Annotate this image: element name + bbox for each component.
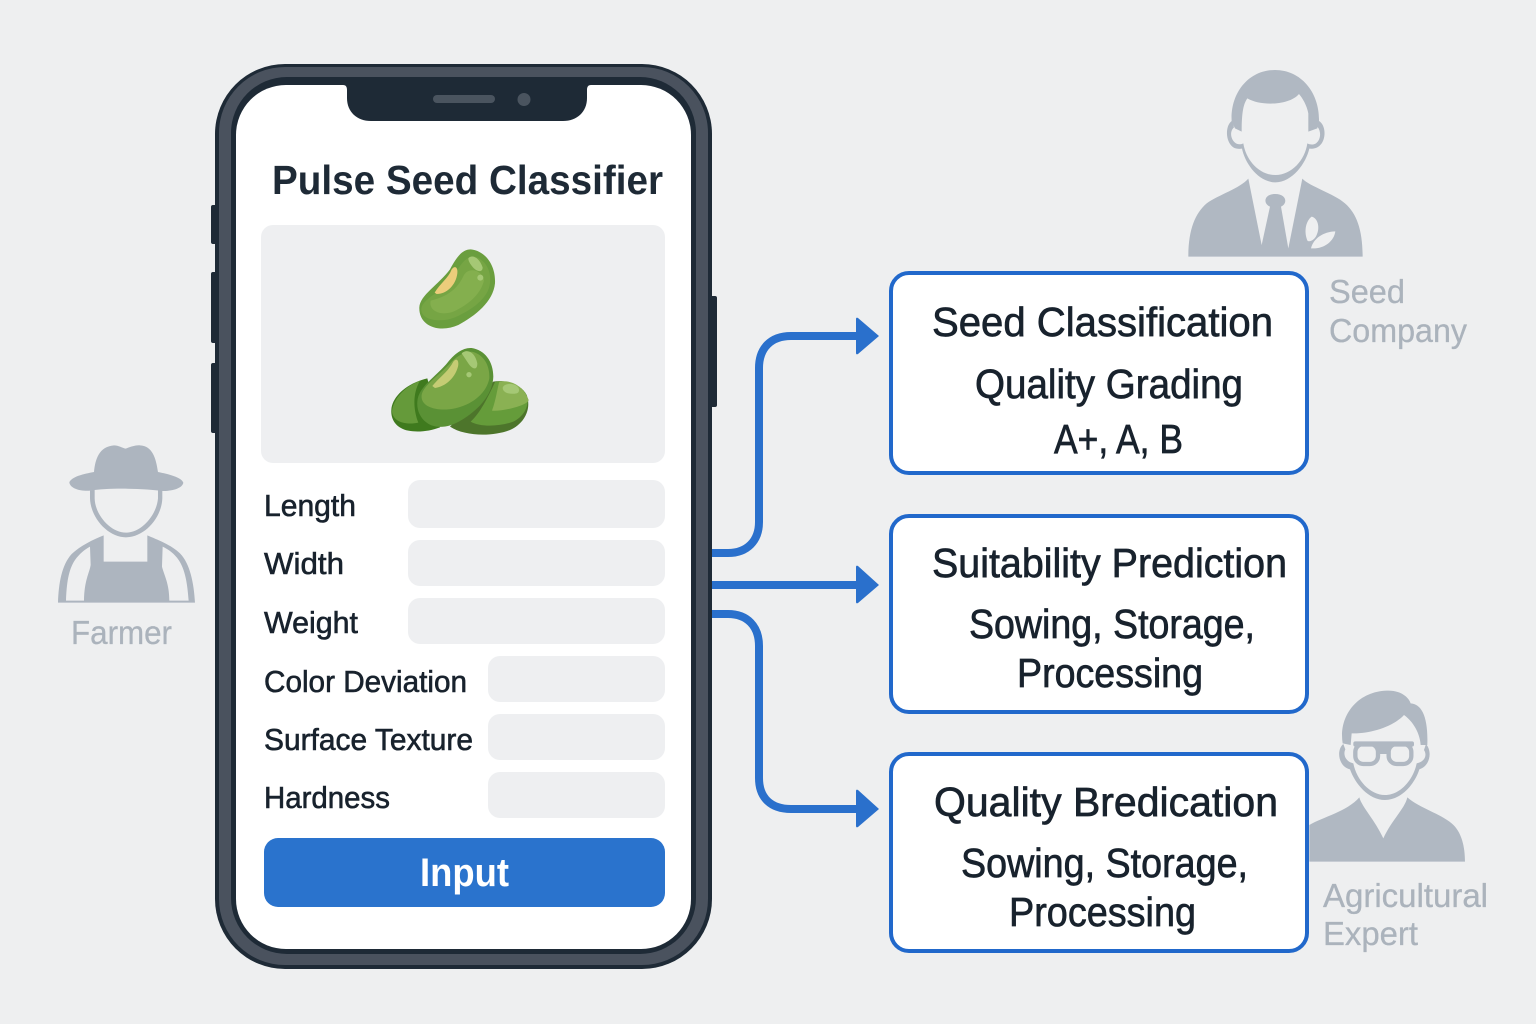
label: seed company (1329, 273, 1467, 349)
form fields (408, 480, 665, 818)
label: agricultural expert (1323, 877, 1488, 952)
field labels (264, 488, 473, 815)
field labels: Width (264, 546, 344, 581)
seed company figure (1188, 70, 1363, 257)
label: Farmer: Farmer (71, 614, 172, 651)
heading: seed classification: Seed Classification (932, 299, 1273, 345)
arrow: to quality prediction (712, 614, 879, 827)
text: suitability uses: Processing (1017, 650, 1203, 696)
arrow: to seed classification (712, 318, 879, 553)
input button (264, 838, 665, 907)
text: quality grading: Quality Grading (975, 361, 1243, 407)
icon: seed company representative with label (1188, 70, 1467, 349)
arrow: to suitability prediction (712, 566, 879, 603)
field labels: Surface Texture (264, 722, 473, 757)
notch with speaker and camera (343, 82, 591, 121)
phone body (215, 64, 712, 969)
field labels: Color Deviation (264, 664, 467, 699)
field labels: Hardness (264, 780, 390, 815)
label: seed company: Seed (1329, 273, 1405, 310)
heading: suitability prediction: Suitability Prediction (932, 540, 1287, 586)
label: agricultural expert: Agricultural (1323, 877, 1488, 914)
phone mockup (211, 64, 717, 969)
panel: quality bredication (891, 754, 1307, 951)
phone side buttons (211, 205, 717, 433)
agricultural expert figure (1309, 691, 1465, 862)
text: suitability uses (969, 601, 1255, 696)
arrows from phone to result cards (712, 318, 879, 827)
input button: Input (420, 851, 509, 895)
title: Pulse Seed Classifier (272, 157, 663, 203)
icon: agricultural expert with label (1309, 691, 1488, 952)
icon: farmer with label (58, 445, 195, 651)
icon: bean cluster (391, 348, 529, 435)
text: suitability uses: Sowing, Storage, (969, 601, 1255, 647)
text: quality uses: Sowing, Storage, (961, 840, 1248, 886)
field labels: Length (264, 488, 356, 523)
icon: single green bean (419, 249, 495, 329)
text: grades: A+, A, B (1054, 416, 1183, 462)
label: seed company: Company (1329, 312, 1467, 349)
field labels: Weight (264, 605, 358, 640)
panel: seed classification (891, 273, 1307, 473)
text: quality uses (961, 840, 1248, 935)
farmer figure (58, 445, 195, 603)
panel: suitability prediction (891, 516, 1307, 712)
heading: quality bredication: Quality Bredication (934, 779, 1278, 825)
text: quality uses: Processing (1009, 889, 1196, 935)
label: agricultural expert: Expert (1323, 915, 1418, 952)
seed image panel (261, 225, 665, 463)
